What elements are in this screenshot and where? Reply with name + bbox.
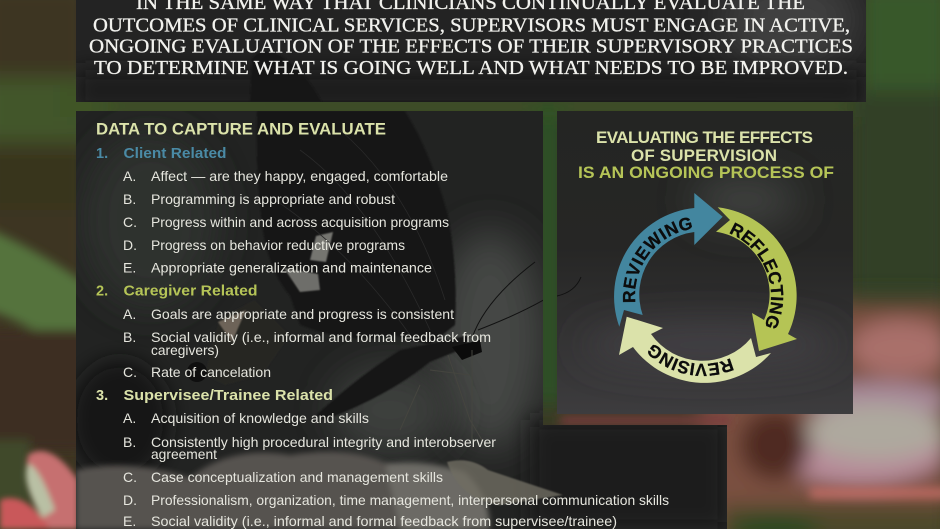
panel: data to capture (70, 111, 727, 529)
process panel background (557, 111, 853, 414)
supervisee list: Professionalism, organization, time management, interpersonal communication skills (151, 492, 669, 508)
intro text: TO DETERMINE WHAT IS GOING WELL AND WHAT NEEDS TO BE IMPROVED. (94, 57, 848, 79)
supervisee list: C. (123, 469, 137, 485)
butterfly and flower photo background (70, 111, 727, 529)
arrow: reflecting: REFLECTING (730, 222, 784, 328)
panel: ongoing process (557, 111, 853, 414)
arrow: reviewing (614, 193, 723, 326)
section 2: caregiver related (96, 284, 491, 380)
arrow: reflecting (716, 207, 797, 351)
caregiver list (123, 306, 491, 380)
client related heading: Client Related (124, 146, 226, 162)
cycle diagram (614, 193, 797, 383)
process title (578, 128, 834, 182)
client list: A. (123, 168, 136, 184)
arrow: revising: REVISING (648, 344, 734, 376)
arrow: reviewing: REVIEWING (622, 218, 692, 302)
supervisee list: A. (123, 410, 136, 426)
panel: intro statement (76, 0, 866, 110)
supervisee list (123, 410, 669, 529)
supervisee heading: Supervisee/Trainee Related (124, 388, 333, 404)
client list: Appropriate generalization and maintenance (151, 260, 432, 276)
supervisee list: Consistently high procedural integrity and interobserver (151, 434, 496, 450)
client list: E. (123, 260, 136, 276)
process title: IS AN ONGOING PROCESS OF (578, 163, 834, 182)
supervisee list: D. (123, 492, 137, 508)
supervisee list: Case conceptualization and management skills (151, 469, 443, 485)
caregiver list: caregivers) (151, 342, 219, 358)
client list: C. (123, 214, 137, 230)
supervisee list: E. (123, 513, 136, 529)
arrow: revising (619, 316, 771, 383)
intro panel photo background (76, 0, 866, 110)
caregiver list: C. (123, 364, 137, 380)
process title: OF SUPERVISION (631, 146, 777, 165)
supervisee list: Acquisition of knowledge and skills (151, 410, 369, 426)
client list: D. (123, 237, 137, 253)
client list: Progress on behavior reductive programs (151, 237, 405, 253)
caregiver list: Goals are appropriate and progress is consistent (151, 306, 454, 322)
intro text (89, 0, 853, 79)
client list: Affect — are they happy, engaged, comfortable (151, 168, 448, 184)
caregiver list: A. (123, 306, 136, 322)
process title: EVALUATING THE EFFECTS (596, 128, 813, 147)
caregiver heading: Caregiver Related (124, 284, 258, 300)
client list: Programming is appropriate and robust (151, 191, 395, 207)
client related heading: 1. (96, 146, 108, 162)
caregiver list: B. (123, 329, 136, 345)
caregiver list: Social validity (i.e., informal and formal feedback from (151, 329, 491, 345)
supervisee list: agreement (151, 446, 217, 462)
intro text: ONGOING EVALUATION OF THE EFFECTS OF THEIR SUPERVISORY PRACTICES (89, 36, 853, 58)
section 1: client related (96, 146, 449, 276)
client list: B. (123, 191, 136, 207)
section 3: supervisee/trainee related (96, 388, 669, 529)
supervisee list: B. (123, 434, 136, 450)
intro text: OUTCOMES OF CLINICAL SERVICES, SUPERVISORS MUST ENGAGE IN ACTIVE, (93, 14, 850, 36)
caregiver list: Rate of cancelation (151, 364, 271, 380)
supervisee list: Social validity (i.e., informal and formal feedback from supervisee/trainee) (151, 513, 617, 529)
caregiver heading: 2. (96, 284, 108, 300)
client list (123, 168, 449, 276)
heading: data to capture and evaluate: DATA TO CAPTURE AND EVALUATE (96, 120, 386, 138)
supervisee heading: 3. (96, 388, 108, 404)
client list: Progress within and across acquisition programs (151, 214, 449, 230)
